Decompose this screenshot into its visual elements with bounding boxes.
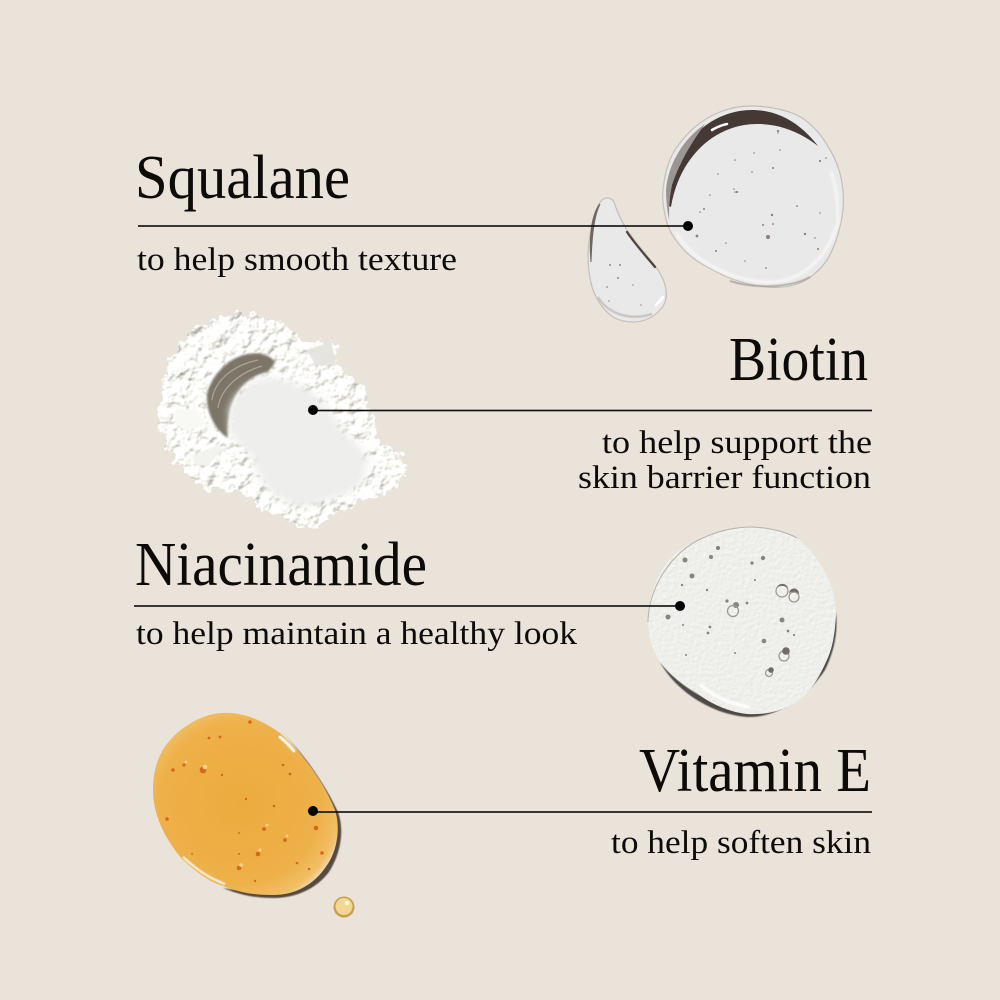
section: vitamin E — [308, 737, 872, 861]
description: to help support the — [602, 425, 872, 461]
leader line with dot — [308, 405, 872, 415]
heading: Vitamin E: Vitamin E — [639, 737, 871, 805]
image: small oil droplet — [334, 896, 354, 918]
image: niacinamide gel drop — [648, 527, 837, 717]
heading: Squalane: Squalane — [135, 144, 350, 212]
image: vitamin E oil drop — [153, 713, 354, 918]
description — [578, 425, 872, 496]
section: biotin — [308, 326, 872, 496]
leader line with dot — [138, 221, 693, 231]
image: squalane droplets — [588, 106, 844, 322]
description: to help smooth texture — [137, 242, 457, 278]
image: biotin powder — [160, 314, 405, 526]
heading: Niacinamide: Niacinamide — [135, 531, 427, 599]
description: skin barrier function — [578, 460, 871, 496]
description: to help soften skin — [611, 825, 871, 861]
section: niacinamide — [134, 531, 685, 652]
leader line with dot — [134, 601, 685, 611]
leader line with dot — [308, 806, 872, 816]
heading: Biotin: Biotin — [729, 326, 868, 394]
description: to help maintain a healthy look — [136, 616, 578, 652]
section: squalane — [135, 144, 693, 278]
